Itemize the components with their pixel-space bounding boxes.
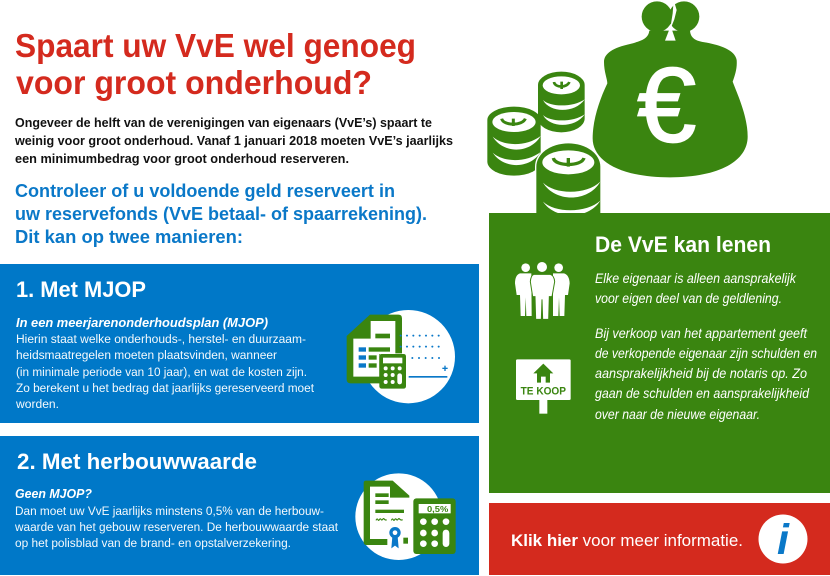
panel body text bbox=[15, 332, 315, 411]
icon: document with calculator bbox=[347, 310, 455, 403]
panel body text: waarde van het gebouw reserveren. De herbouwwaarde staat bbox=[14, 520, 339, 534]
intro text bbox=[14, 116, 453, 166]
icon: te koop sign: TE KOOP bbox=[521, 385, 566, 397]
call to action text: Klik hier voor meer informatie. bbox=[511, 531, 743, 550]
coin stack: top bbox=[538, 72, 585, 132]
panel: de VvE kan lenen bbox=[489, 213, 830, 493]
panel heading: De VvE kan lenen bbox=[595, 232, 771, 257]
text: selling the apartment: Bij verkoop van het appartement geeft bbox=[595, 326, 808, 341]
panel body text: Dan moet uw VvE jaarlijks minstens 0,5% van de herbouw- bbox=[15, 504, 324, 518]
panel heading: 1. Met MJOP: 1. Met MJOP bbox=[16, 277, 146, 302]
panel body text: op het polisblad van de brand- en opstalverzekering. bbox=[15, 536, 291, 550]
panel body text bbox=[14, 504, 339, 550]
icon: money purse with euro: € bbox=[637, 46, 696, 164]
blue subheading: Dit kan op twee manieren: bbox=[15, 226, 243, 247]
text: selling the apartment: over naar de nieuwe eigenaar. bbox=[595, 407, 760, 422]
panel subheading: In een meerjarenonderhoudsplan (MJOP) bbox=[16, 315, 268, 330]
title: Spaart uw VvE wel genoeg bbox=[15, 27, 416, 64]
icon: policy document with calculator bbox=[355, 473, 456, 560]
panel body text: (in minimale periode van 10 jaar), en wat de kosten zijn. bbox=[16, 365, 307, 379]
text: liability bbox=[595, 271, 797, 306]
panel heading: 2. Met herbouwwaarde: 2. Met herbouwwaarde bbox=[17, 449, 257, 474]
text: liability: Elke eigenaar is alleen aansprakelijk bbox=[595, 271, 797, 286]
text: liability: voor eigen deel van de geldlening. bbox=[595, 291, 782, 306]
panel subheading: Geen MJOP? bbox=[15, 486, 92, 501]
blue subheading: uw reservefonds (VvE betaal- of spaarrekening). bbox=[15, 203, 427, 224]
text: selling the apartment: aansprakelijkheid bij de notaris op. Zo bbox=[595, 366, 807, 381]
icon: three people bbox=[515, 262, 570, 319]
panel: met MJOP bbox=[0, 264, 479, 423]
icon: coin stacks bbox=[487, 72, 600, 215]
coin stack: front bbox=[536, 143, 600, 215]
icon: info bbox=[758, 514, 808, 564]
blue subheading bbox=[15, 180, 427, 247]
intro text: weinig voor groot onderhoud. Vanaf 1 januari 2018 moeten VvE’s jaarlijks bbox=[14, 134, 453, 148]
panel body text: worden. bbox=[15, 397, 59, 411]
icon: policy document with calculator: 0,5% bbox=[427, 505, 448, 514]
blue subheading: Controleer of u voldoende geld reserveert in bbox=[15, 180, 395, 201]
panel body text: Hierin staat welke onderhouds-, herstel- en duurzaam- bbox=[16, 332, 306, 346]
coin stack: left bbox=[487, 107, 541, 176]
title bbox=[15, 27, 416, 101]
panel body text: Zo berekent u het bedrag dat jaarlijks gereserveerd moet bbox=[16, 381, 315, 395]
text: selling the apartment: gaan de schulden en aansprakelijkheid bbox=[595, 386, 809, 401]
icon: te koop sign bbox=[516, 359, 571, 414]
icon: money purse with euro bbox=[593, 0, 748, 177]
text: selling the apartment bbox=[595, 326, 817, 422]
title: voor groot onderhoud? bbox=[16, 64, 372, 101]
intro text: Ongeveer de helft van de verenigingen van eigenaars (VvE’s) spaart te bbox=[15, 116, 432, 130]
panel body text: heidsmaatregelen moeten plaatsvinden, wanneer bbox=[16, 348, 277, 362]
panel: met herbouwwaarde bbox=[0, 436, 479, 575]
panel: meer informatie bbox=[489, 503, 830, 575]
intro text: een minimumbedrag voor groot onderhoud reserveren. bbox=[15, 152, 349, 166]
icon: info: i bbox=[777, 516, 790, 564]
